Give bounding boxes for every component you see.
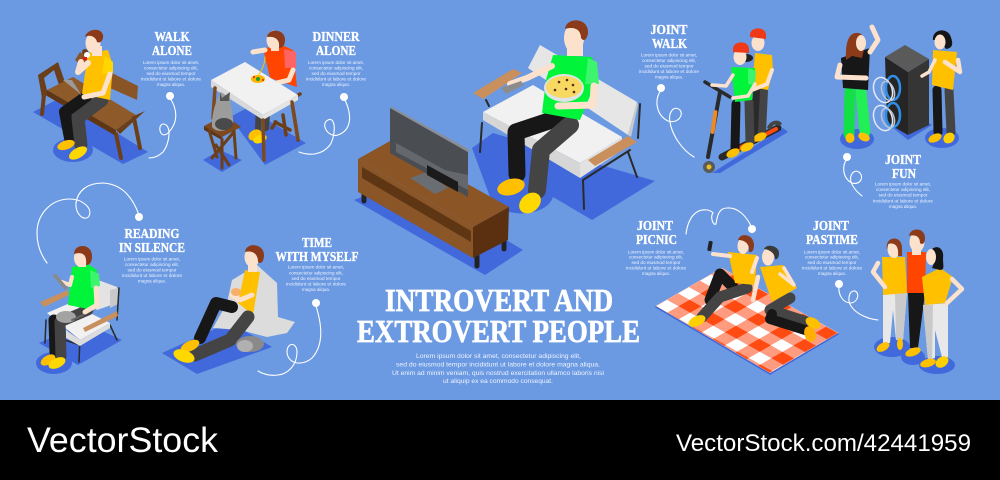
label: walk alone: Lorem ipsum dolor sit amet, <box>143 60 199 65</box>
label: joint picnic <box>626 218 687 276</box>
footer bar <box>0 400 1000 480</box>
label: walk alone: incididunt ut labore et dolore <box>141 76 202 82</box>
label: joint fun: FUN <box>892 166 916 181</box>
label: reading in silence: READING <box>124 226 180 241</box>
label: joint picnic: JOINT <box>637 218 673 233</box>
footer brand: VectorStock <box>27 421 219 460</box>
label: time with myself: magna aliqua. <box>302 287 330 292</box>
label: walk alone: WALK <box>154 29 190 44</box>
label: joint fun: Lorem ipsum dolor sit amet, <box>875 182 931 186</box>
label: joint fun: sed do eiusmod tempor <box>878 192 928 198</box>
connector: joint walk curl <box>657 84 694 157</box>
scene: joint pastime, three friends <box>873 229 962 374</box>
connector: dinner alone curl <box>299 93 350 154</box>
sofa and person shadow <box>472 133 655 220</box>
label: walk alone: ALONE <box>152 43 192 58</box>
label: dinner alone: DINNER <box>312 29 360 44</box>
label: joint walk: WALK <box>652 36 687 51</box>
scene: walk alone, man on bench <box>33 30 148 164</box>
label: joint picnic: PICNIC <box>636 232 677 247</box>
label: joint walk: JOINT <box>650 22 688 37</box>
title body text: Ut enim ad minim veniam, quis nostrud exercitation ullamco laboris nisi <box>392 370 605 377</box>
label: dinner alone: magna aliqua. <box>322 82 350 87</box>
connector: time with myself curl <box>258 299 321 375</box>
label: joint pastime: JOINT <box>813 218 849 233</box>
scene: reading in silence, woman in armchair <box>36 246 122 374</box>
label: dinner alone: consectetur adipiscing elit, <box>309 66 363 70</box>
scene: joint fun, two women and speaker <box>837 27 960 149</box>
label: time with myself <box>276 235 358 292</box>
scene: center, man on sofa watching tv <box>354 20 655 275</box>
label: joint picnic: consectetur adipiscing elit, <box>629 254 683 260</box>
tv cabinet <box>354 141 523 275</box>
title body text <box>392 353 605 385</box>
label: joint fun: consectetur adipiscing elit, <box>876 187 930 192</box>
label: reading in silence <box>119 226 185 284</box>
label: joint walk: magna aliqua. <box>655 74 683 80</box>
connector: joint pastime curl <box>835 280 878 320</box>
label: time with myself: TIME <box>302 235 332 250</box>
tv <box>390 107 470 197</box>
label: joint walk: sed do eiusmod tempor <box>644 64 694 68</box>
sofa <box>473 45 640 209</box>
label: joint walk: consectetur adipiscing elit, <box>642 58 696 63</box>
label: time with myself: incididunt ut labore et dolore <box>286 282 347 286</box>
label: joint pastime: consectetur adipiscing elit, <box>805 254 859 260</box>
label: reading in silence: IN SILENCE <box>119 240 185 255</box>
label: dinner alone: Lorem ipsum dolor sit amet, <box>308 60 364 65</box>
label: walk alone: consectetur adipiscing elit, <box>144 66 198 70</box>
label: reading in silence: incididunt ut labore et dolore <box>122 273 183 278</box>
label: joint fun <box>873 152 934 209</box>
label: dinner alone <box>306 29 367 87</box>
label: dinner alone: ALONE <box>316 43 356 58</box>
title body text: sed do eiusmod tempor incididunt ut labore et dolore magna aliqua. <box>396 362 600 368</box>
label: time with myself: sed do eiusmod tempor <box>292 276 341 281</box>
label: dinner alone: incididunt ut labore et dolore <box>306 76 367 82</box>
label: time with myself: consectetur adipiscing elit, <box>289 270 343 276</box>
label: joint pastime: Lorem ipsum dolor sit amet, <box>804 250 860 254</box>
connector: joint picnic curl <box>686 208 756 234</box>
footer image id: VectorStock.com/42441959 <box>676 430 971 457</box>
label: reading in silence: consectetur adipiscing elit, <box>125 262 179 267</box>
label: joint picnic: magna aliqua. <box>642 271 670 276</box>
label: joint walk: Lorem ipsum dolor sit amet, <box>641 52 697 58</box>
scene: joint walk, couple on scooter <box>703 28 788 173</box>
label: time with myself: Lorem ipsum dolor sit amet, <box>288 264 344 270</box>
label: walk alone: sed do eiusmod tempor <box>146 71 196 76</box>
title body text: ut aliquip ex ea commodo consequat. <box>443 378 553 385</box>
title: EXTROVERT PEOPLE <box>357 313 640 349</box>
label: joint pastime: incididunt ut labore et dolore <box>802 266 863 270</box>
label: dinner alone: sed do eiusmod tempor <box>312 71 361 76</box>
label: reading in silence: sed do eiusmod tempor <box>128 268 177 272</box>
title body text: Lorem ipsum dolor sit amet, consectetur adipiscing elit, <box>416 353 581 360</box>
label: joint walk <box>639 22 700 80</box>
label: walk alone: magna aliqua. <box>157 82 185 87</box>
label: joint pastime: sed do eiusmod tempor <box>808 260 857 265</box>
person on sofa <box>495 20 599 218</box>
scene: dinner alone, woman at table with cat <box>203 30 306 172</box>
label: joint walk: incididunt ut labore et dolore <box>639 69 700 74</box>
scene: time with myself, man with blanket <box>162 245 295 374</box>
title <box>357 282 640 349</box>
label: joint pastime <box>802 218 863 276</box>
label: joint picnic: Lorem ipsum dolor sit amet, <box>628 250 684 254</box>
connector: reading curl <box>37 183 143 263</box>
label: walk alone <box>141 29 202 87</box>
connector: walk alone curl <box>149 92 176 158</box>
scene: joint picnic on checked blanket <box>656 235 838 374</box>
label: joint picnic: incididunt ut labore et dolore <box>626 266 687 270</box>
label: joint picnic: sed do eiusmod tempor <box>632 260 681 265</box>
label: joint fun: JOINT <box>885 152 921 167</box>
connector: joint fun curl <box>843 153 862 196</box>
label: reading in silence: Lorem ipsum dolor sit amet, <box>124 256 180 262</box>
title: INTROVERT AND <box>385 282 613 318</box>
label: joint pastime: magna aliqua. <box>818 271 846 276</box>
label: joint fun: incididunt ut labore et dolore <box>873 198 934 204</box>
label: joint pastime: PASTIME <box>806 232 858 247</box>
label: joint fun: magna aliqua. <box>889 204 917 209</box>
label: time with myself: WITH MYSELF <box>276 249 358 264</box>
label: reading in silence: magna aliqua. <box>138 278 166 284</box>
